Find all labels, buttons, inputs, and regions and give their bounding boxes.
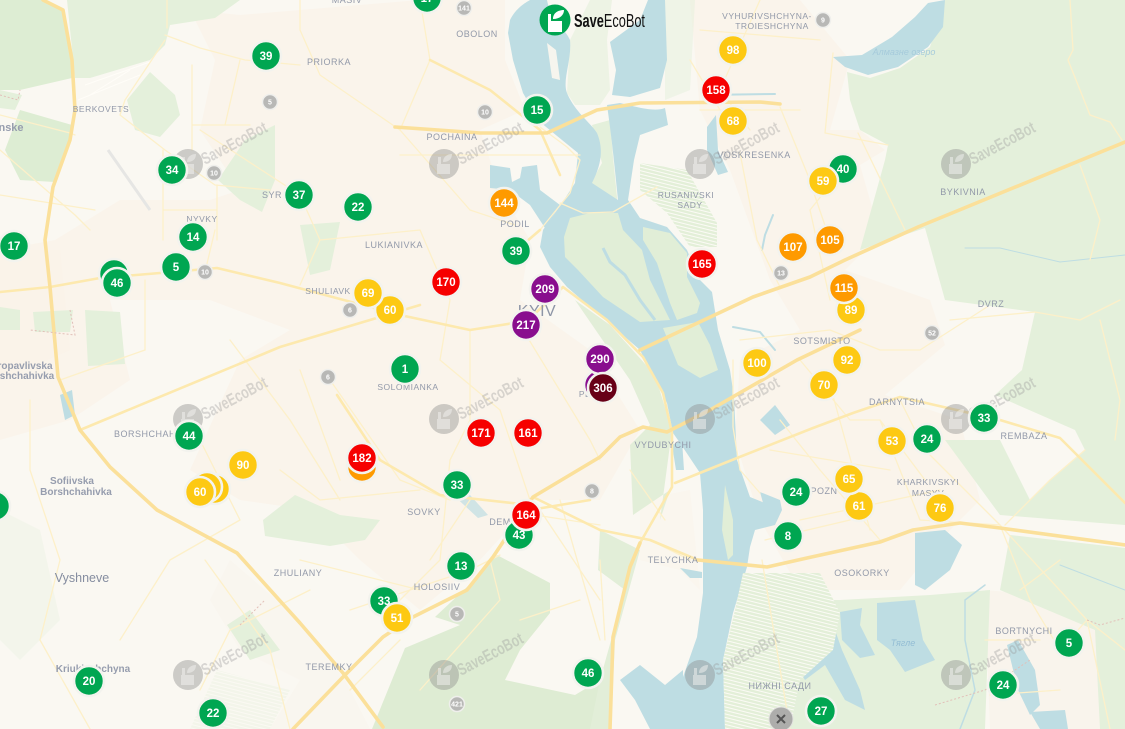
SaveEcoBot watermarks: SaveEcoBot — [198, 118, 271, 169]
place labels: Vyshneve — [55, 571, 109, 585]
place labels: PODIL — [500, 219, 530, 229]
air quality markers: 164 — [516, 510, 536, 522]
small grey station markers: 10 — [201, 270, 209, 276]
place labels: SOVKY — [407, 507, 441, 517]
SaveEcoBot watermarks: SaveEcoBot — [198, 373, 271, 424]
air quality markers: 68 — [727, 116, 740, 128]
air quality markers: 37 — [293, 190, 305, 202]
small grey station markers: 8 — [590, 488, 594, 496]
air quality markers: 115 — [835, 283, 854, 295]
river channels and canals — [600, 94, 1125, 729]
air quality markers: 306 — [593, 383, 613, 395]
air quality markers: 33 — [378, 596, 390, 608]
air quality markers: 22 — [352, 202, 364, 214]
place labels: TEREMKY — [305, 662, 353, 672]
air quality markers: 144 — [494, 198, 514, 210]
air quality markers: 5 — [173, 262, 180, 274]
air quality markers: 60 — [384, 305, 396, 317]
place labels: Алмазне озеро — [872, 47, 935, 57]
place labels: RUSANIVSKI — [658, 190, 714, 200]
air quality markers: 107 — [783, 242, 803, 254]
air quality markers: 89 — [845, 305, 857, 317]
air quality markers: 171 — [471, 428, 491, 440]
air quality markers: 15 — [531, 105, 544, 117]
place labels: NYVKY — [186, 214, 218, 224]
place labels: VYDUBYCHI — [634, 440, 692, 450]
place labels: OSOKORKY — [834, 568, 890, 578]
small grey station markers: 52 — [928, 330, 936, 338]
SaveEcoBot watermarks: SaveEcoBot — [454, 373, 527, 424]
small grey station markers: 141 — [458, 6, 470, 12]
air quality markers: 105 — [820, 235, 840, 247]
small grey station markers: 6 — [348, 308, 352, 314]
air quality markers: 165 — [692, 259, 712, 271]
air quality markers: 8 — [785, 531, 792, 543]
small grey station markers: 421 — [451, 702, 463, 708]
air quality markers: 290 — [590, 354, 610, 366]
air quality markers: 20 — [83, 676, 95, 688]
SaveEcoBot watermarks: SaveEcoBot — [710, 629, 783, 680]
SaveEcoBot watermarks: SaveEcoBot — [966, 629, 1039, 680]
place labels: REMBAZA — [1000, 431, 1048, 441]
small grey station markers: 10 — [210, 170, 218, 178]
place labels: SHULIAVK — [305, 286, 351, 296]
air quality markers: 53 — [886, 436, 898, 448]
air quality markers: 33 — [978, 413, 990, 425]
air quality markers: 39 — [260, 51, 272, 63]
place labels: SOLOMIANKA — [377, 382, 439, 392]
air quality markers: 40 — [837, 164, 849, 176]
place labels: shchahivka — [0, 371, 55, 382]
place labels: SADY — [677, 200, 703, 210]
place labels: BORTNYCHI — [995, 626, 1053, 636]
air quality markers: 24 — [921, 434, 934, 446]
place labels: VYHURIVSHCHYNA- — [722, 11, 812, 21]
place labels: TROIESHCHYNA — [735, 21, 809, 31]
place labels: OBOLON — [456, 29, 498, 39]
SaveEcoBot watermarks: SaveEcoBot — [454, 118, 527, 169]
air quality markers: 170 — [436, 277, 456, 289]
place labels: Borshchahivka — [40, 487, 112, 498]
place labels: SOTSMISTO — [793, 336, 851, 346]
allotment gardens — [78, 62, 840, 729]
air quality markers: 59 — [817, 176, 829, 188]
small grey station markers: 9 — [821, 18, 825, 24]
place labels: KYIV — [518, 303, 556, 320]
small grey station markers: 5 — [455, 612, 459, 618]
place labels: НИЖНІ САДИ — [749, 681, 811, 691]
small grey station markers: 5 — [268, 100, 272, 106]
SaveEcoBot watermarks: SaveEcoBot — [454, 629, 527, 680]
air quality markers: 51 — [391, 613, 404, 625]
air quality markers: 5 — [1066, 638, 1073, 650]
air quality markers: 33 — [451, 480, 463, 492]
air quality markers: 161 — [518, 428, 538, 440]
place labels: HOLOSIIV — [414, 582, 460, 592]
air quality markers: 76 — [934, 503, 946, 515]
place labels: VOSKRESENKA — [717, 150, 791, 160]
air quality markers: 98 — [727, 45, 740, 57]
air quality markers: 13 — [455, 561, 467, 573]
close button — [769, 707, 793, 729]
place labels: Kriukivshchyna — [56, 664, 131, 675]
air quality markers: 61 — [853, 501, 866, 513]
air quality markers: 217 — [516, 320, 536, 332]
place labels: SYR — [262, 190, 282, 200]
SaveEcoBot watermarks — [173, 118, 1039, 690]
place labels: KHARKIVSKYI — [897, 477, 959, 487]
place labels: DEM — [489, 517, 511, 527]
air quality markers: 22 — [207, 708, 219, 720]
air quality markers: 43 — [513, 530, 525, 542]
place labels: DVRZ — [978, 299, 1004, 309]
place labels: BYKIVNIA — [940, 187, 986, 197]
medium roads — [0, 60, 1125, 560]
air quality markers: 24 — [790, 487, 803, 499]
air quality markers: 44 — [183, 431, 196, 443]
SaveEcoBot logo: SaveEcoBot — [574, 11, 645, 31]
place labels: BERKOVETS — [73, 104, 129, 114]
air quality markers: 17 — [8, 241, 20, 253]
place labels: POCHAINA — [426, 132, 478, 142]
place labels: ZHULIANY — [274, 568, 322, 578]
airport runway — [108, 150, 150, 210]
air quality markers: 65 — [843, 474, 856, 486]
air quality markers: 92 — [841, 355, 853, 367]
SaveEcoBot watermarks: SaveEcoBot — [710, 373, 783, 424]
place labels: DARNYTSIA — [869, 397, 925, 407]
place labels: TELYCHKA — [648, 555, 698, 565]
SaveEcoBot watermarks: SaveEcoBot — [198, 629, 271, 680]
place labels: POZN — [810, 486, 838, 496]
place labels: Sofiivska — [50, 476, 94, 487]
SaveEcoBot watermarks: SaveEcoBot — [966, 118, 1039, 169]
small grey station markers — [198, 0, 940, 712]
SaveEcoBot logo — [540, 4, 645, 36]
place labels: PE — [579, 389, 591, 399]
air quality markers: 46 — [582, 668, 594, 680]
river islands — [547, 43, 733, 560]
air quality markers: 27 — [815, 706, 827, 718]
air quality markers: 209 — [535, 284, 555, 296]
air quality markers: 90 — [237, 460, 249, 472]
air quality markers: 100 — [747, 358, 767, 370]
place labels: Тягле — [891, 638, 915, 648]
riverside channel inside island — [603, 248, 655, 320]
place labels: PRIORKA — [307, 57, 351, 67]
air quality markers: 182 — [352, 453, 372, 465]
air quality markers: 34 — [166, 165, 179, 177]
air quality markers: 39 — [510, 246, 522, 258]
small grey station markers: 13 — [777, 270, 785, 278]
air quality markers: 60 — [194, 487, 206, 499]
air quality markers: 14 — [187, 232, 200, 244]
place labels: MASYV — [912, 488, 944, 498]
SaveEcoBot watermarks: SaveEcoBot — [710, 118, 783, 169]
air quality markers: 70 — [818, 380, 830, 392]
SaveEcoBot watermarks: SaveEcoBot — [966, 373, 1039, 424]
air quality markers: 69 — [362, 288, 374, 300]
small grey station markers: 10 — [481, 110, 489, 116]
air quality markers: 46 — [111, 278, 123, 290]
place labels: BORSHCHAH — [114, 429, 176, 439]
air quality markers: 24 — [997, 680, 1010, 692]
place labels: LUKIANIVKA — [365, 240, 423, 250]
air quality markers: 1 — [402, 364, 409, 376]
air quality markers: 158 — [706, 85, 726, 97]
small grey station markers: 6 — [326, 374, 330, 382]
